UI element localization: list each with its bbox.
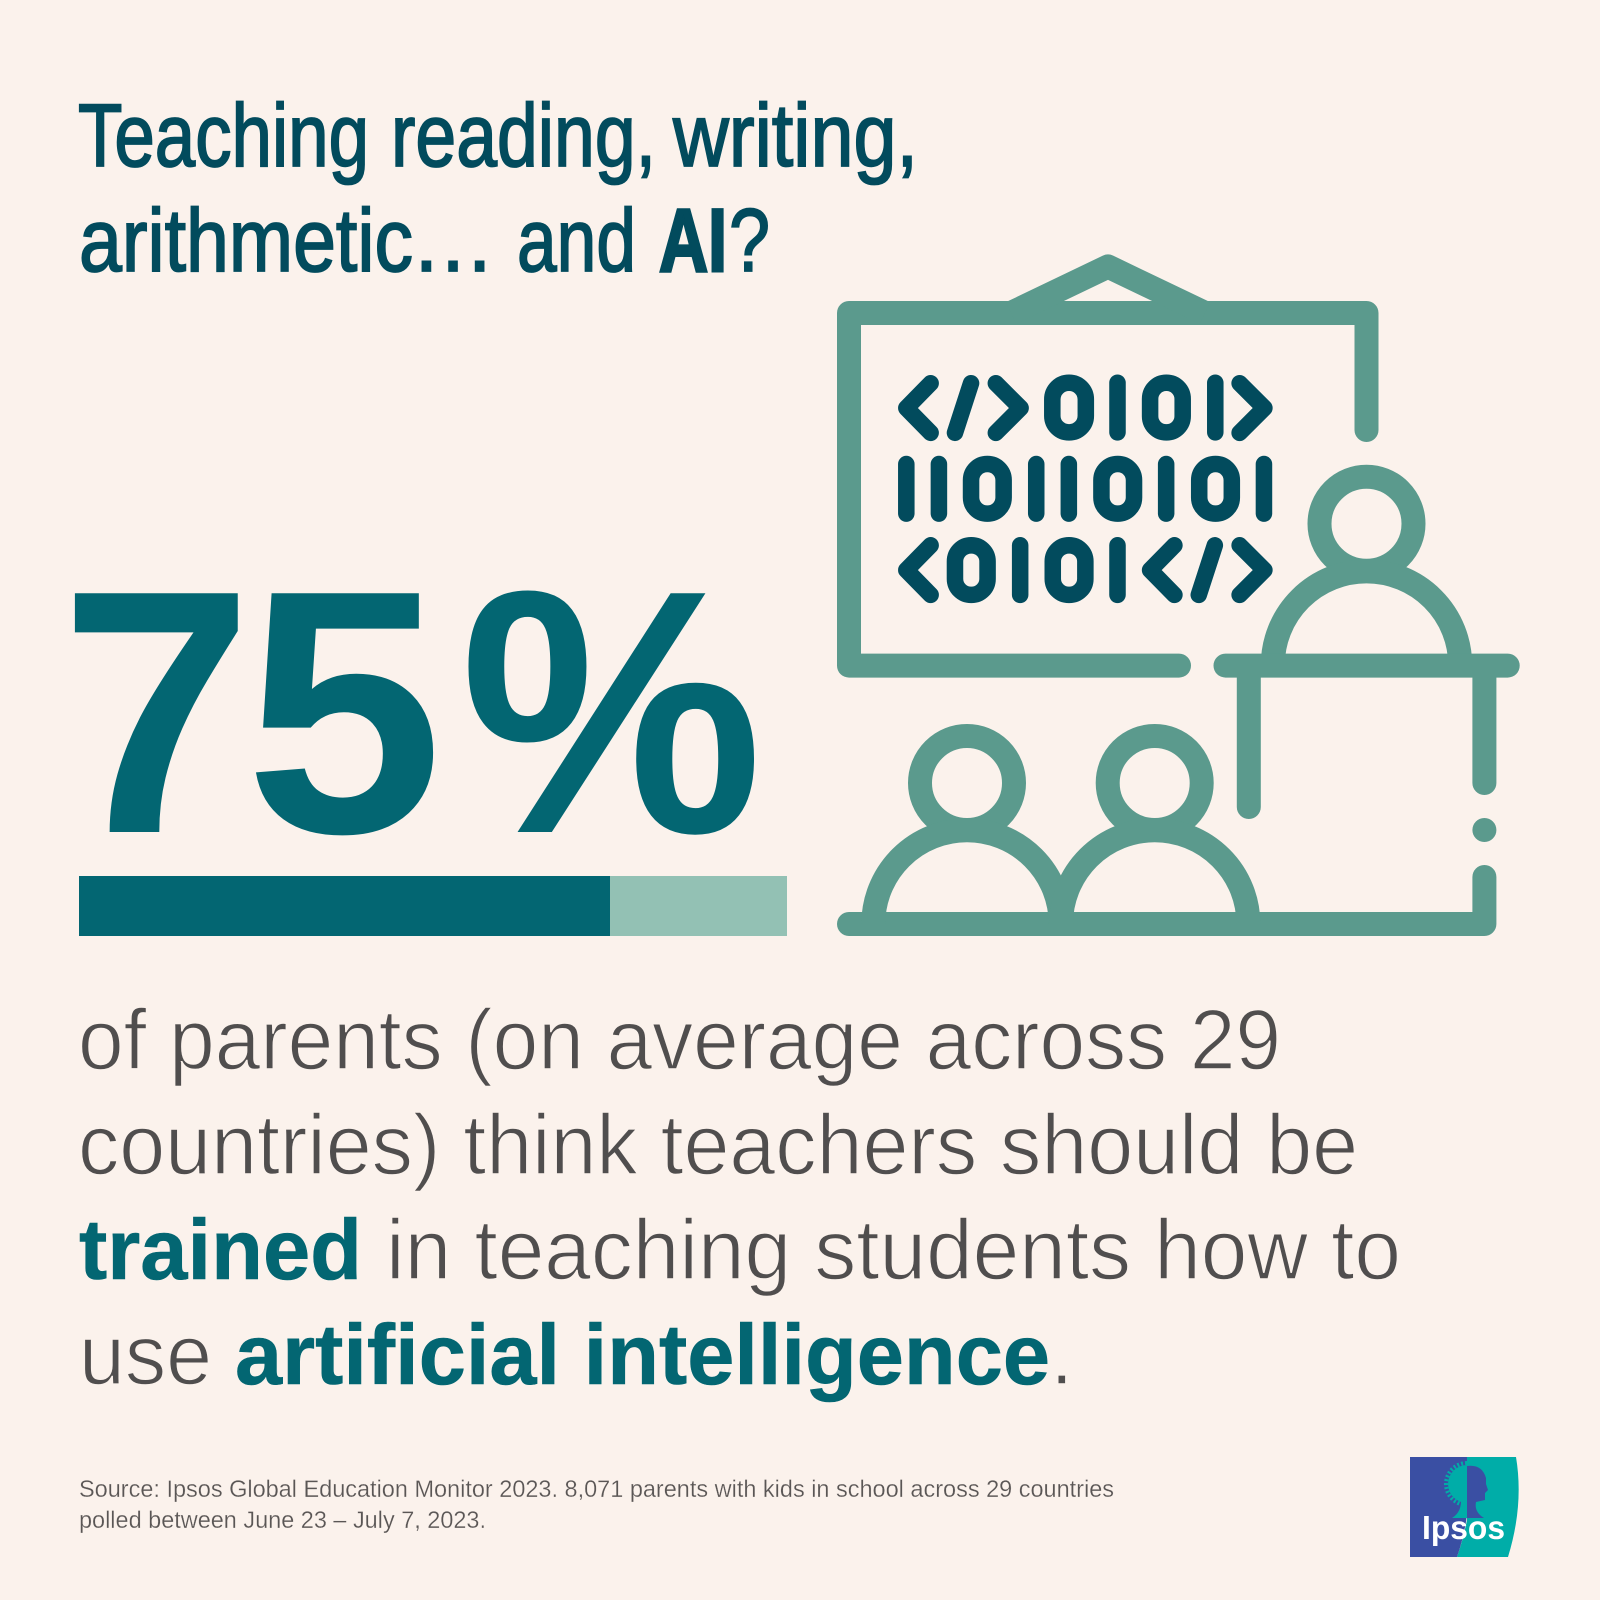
icon: board	[849, 313, 1366, 666]
icon: board hanger	[1011, 266, 1205, 313]
title	[78, 85, 918, 290]
body text: in teaching students how to	[386, 1203, 1401, 1298]
title: …	[411, 190, 495, 290]
body text: of parents (on average across 29	[78, 993, 1281, 1088]
logo: Ipsos: Ipsos	[1422, 1509, 1505, 1546]
title: AI	[659, 190, 727, 290]
title: reading,	[391, 85, 656, 185]
body text	[78, 993, 1401, 1403]
big number 75%: 7	[60, 518, 253, 906]
body text: artificial intelligence	[235, 1308, 1050, 1403]
big number 75%: %	[460, 518, 763, 906]
icon: desk	[1226, 666, 1508, 807]
title: arithmetic	[79, 190, 413, 290]
title: Teaching	[78, 85, 369, 185]
icon: dot	[1472, 818, 1496, 842]
icon: student left	[873, 736, 1061, 924]
icon: floor line	[849, 877, 1484, 924]
title: writing,	[672, 85, 918, 185]
progress bar 75 percent	[79, 876, 787, 936]
body text: use	[79, 1308, 212, 1403]
body text: trained	[79, 1203, 362, 1298]
icon: classroom with teacher, students and coding board	[849, 266, 1508, 924]
body text: countries) think teachers should be	[78, 1098, 1358, 1193]
big number 75%: 5	[245, 518, 443, 906]
big number 75%	[60, 518, 763, 906]
icon: code on board	[906, 383, 1264, 595]
icon: student right	[1061, 736, 1248, 924]
source note: Source: Ipsos Global Education Monitor 2023. 8,071 parents with kids in school across 29 countries	[79, 1476, 1114, 1503]
title: and	[517, 190, 636, 290]
title: ?	[729, 190, 770, 290]
body text: .	[1050, 1308, 1074, 1403]
logo: Ipsos	[1410, 1457, 1519, 1557]
icon: teacher	[1273, 477, 1460, 665]
source note: polled between June 23 – July 7, 2023.	[79, 1507, 486, 1534]
source note	[79, 1476, 1114, 1534]
